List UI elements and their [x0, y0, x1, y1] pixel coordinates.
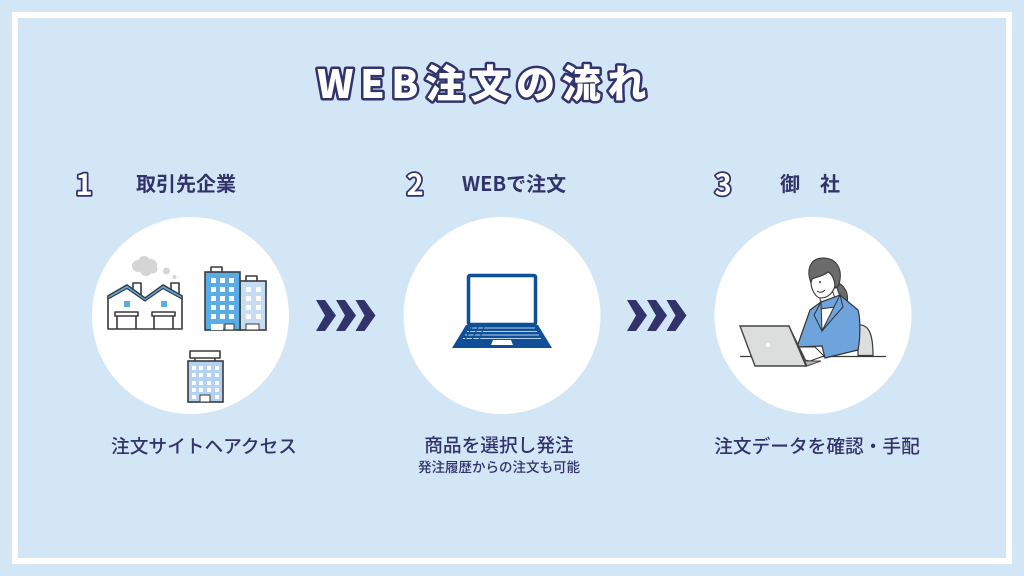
panel: web order circle [404, 217, 600, 414]
note: step 2: 発注履歴からの注文も可能 [418, 456, 580, 476]
step 3 heading: 御 社 [780, 168, 840, 197]
panel: company circle [92, 217, 289, 414]
panel: company staff circle [714, 217, 912, 414]
icon: woman at laptop [740, 258, 886, 366]
arrow: step 2 to 3 [627, 300, 686, 331]
caption: step 2: 商品を選択し発注 [424, 431, 574, 458]
icon: office towers [205, 267, 266, 330]
icon: smoke cloud [132, 256, 176, 279]
icon: laptop [452, 276, 552, 348]
step 1 number: 1 [75, 162, 93, 204]
arrow: step 1 to 2 [316, 300, 376, 331]
step 2 number: 2 [406, 162, 424, 204]
step 3 number: 3 [714, 162, 732, 204]
step 1 heading: 取引先企業 [136, 168, 236, 197]
icon: small office building [188, 351, 223, 402]
caption: step 1: 注文サイトヘアクセス [111, 432, 297, 459]
icon: factory [108, 283, 182, 329]
caption: step 3: 注文データを確認・手配 [714, 432, 920, 459]
title: WEB注文の流れ [317, 54, 653, 110]
step 2 heading: WEBで注文 [462, 168, 566, 197]
